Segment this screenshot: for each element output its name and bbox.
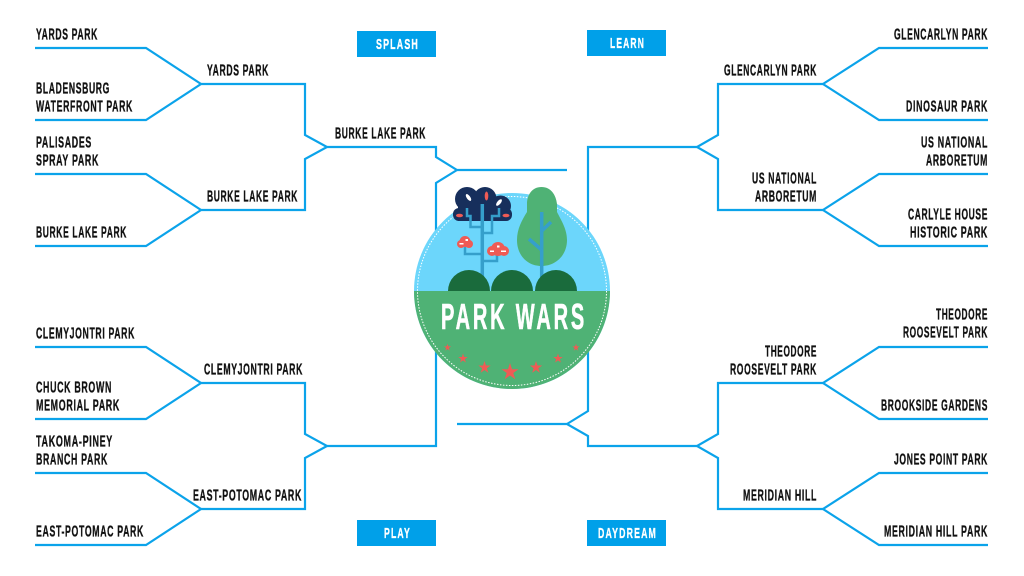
team labels: splash region: SPRAY PARK	[36, 152, 99, 170]
red stars	[444, 344, 580, 379]
team labels: splash region: YARDS PARK	[207, 62, 269, 80]
team labels: splash region: BURKE LAKE PARK	[335, 126, 426, 142]
category label: learn	[587, 30, 666, 56]
team labels: splash region: BURKE LAKE PARK	[36, 224, 127, 242]
team labels: splash region: BLADENSBURG	[36, 80, 110, 98]
bracket: bottom-right daydream	[457, 340, 988, 545]
category label: daydream: DAYDREAM	[598, 525, 657, 542]
bracket: top-right learn	[588, 48, 988, 246]
team labels: splash region: WATERFRONT PARK	[36, 98, 133, 116]
category label: splash	[357, 31, 436, 57]
team labels: daydream region: MERIDIAN HILL	[743, 488, 817, 504]
team labels: play region	[36, 326, 303, 540]
badge sky and ground	[414, 193, 610, 389]
team labels: play region: EAST-POTOMAC PARK	[36, 524, 144, 540]
team labels: daydream region: THEODORE	[765, 344, 817, 360]
bracket: bottom-left play	[35, 340, 436, 545]
team labels: play region: TAKOMA-PINEY	[36, 434, 113, 450]
category label: play: PLAY	[384, 525, 411, 542]
team labels: learn region: GLENCARLYN PARK	[724, 62, 817, 80]
team labels: play region: CHUCK BROWN	[36, 380, 112, 396]
team labels: play region: CLEMYJONTRI PARK	[204, 362, 303, 378]
team labels: learn region	[724, 26, 988, 242]
team labels: daydream region: ROOSEVELT PARK	[730, 362, 817, 378]
icon: dark green bushes	[448, 270, 577, 291]
team labels: learn region: US NATIONAL	[752, 170, 817, 188]
category label: splash: SPLASH	[376, 36, 419, 53]
team labels: play region: BRANCH PARK	[36, 452, 108, 468]
team labels: splash region	[36, 26, 426, 242]
team labels: play region: MEMORIAL PARK	[36, 398, 120, 414]
category label: learn: LEARN	[610, 35, 645, 52]
team labels: play region: CLEMYJONTRI PARK	[36, 326, 135, 342]
category label: daydream	[587, 520, 666, 546]
icon: red mushrooms	[457, 236, 509, 256]
category label: play	[357, 520, 436, 546]
team labels: splash region: BURKE LAKE PARK	[207, 188, 298, 206]
badge title: PARK WARS	[441, 296, 587, 337]
team labels: splash region: YARDS PARK	[36, 26, 98, 44]
team labels: daydream region	[730, 306, 988, 540]
team labels: splash region: PALISADES	[36, 134, 92, 152]
bracket: top-left splash	[35, 48, 567, 246]
team labels: play region: EAST-POTOMAC PARK	[193, 488, 302, 504]
central park wars badge	[414, 187, 610, 389]
team labels: learn region: ARBORETUM	[755, 188, 817, 206]
icon: green pear-shaped tree	[517, 187, 567, 291]
icon: navy tree with branches	[453, 187, 512, 291]
